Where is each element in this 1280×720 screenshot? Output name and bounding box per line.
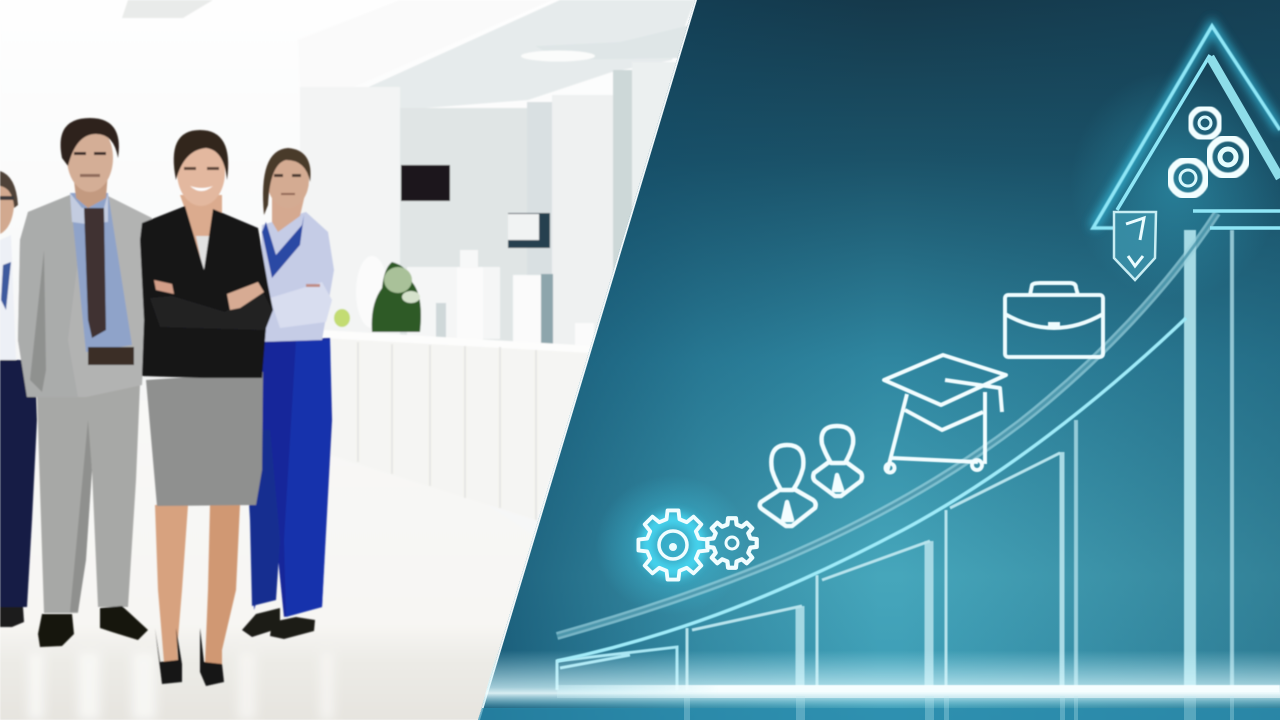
icon: badge shield (1114, 212, 1156, 280)
person: far left woman (0, 171, 37, 627)
potted plant (334, 262, 421, 332)
person body 2 (813, 462, 862, 496)
gear 1 (1190, 108, 1220, 138)
wall screen (401, 165, 450, 201)
chart: rising swoosh arrow (557, 213, 1217, 661)
gear 3 (1170, 160, 1206, 196)
staff group (0, 118, 334, 686)
office background (0, 0, 700, 720)
walls (300, 87, 400, 357)
icon: gears (638, 510, 757, 580)
panel: career growth teal background (478, 0, 1280, 720)
icon: graduation cap (884, 355, 1006, 472)
icon: upward arrow head with gears (1093, 26, 1280, 228)
person: central woman in black jacket (140, 130, 273, 686)
person outline 1 (771, 445, 803, 490)
reception desk (322, 335, 590, 520)
person: woman in blue uniform (242, 148, 334, 639)
gear 2 (1209, 138, 1247, 176)
ceiling (340, 0, 695, 110)
person body 1 (760, 489, 816, 526)
counter items (407, 267, 500, 339)
person: man in grey suit (18, 118, 152, 647)
person outline 2 (822, 426, 853, 463)
printer (508, 213, 550, 248)
icon: two people (760, 426, 862, 526)
glowing baseline (478, 650, 1280, 720)
chart: rising bars (557, 230, 1232, 690)
floor (0, 400, 540, 720)
icon: briefcase (1005, 283, 1103, 357)
